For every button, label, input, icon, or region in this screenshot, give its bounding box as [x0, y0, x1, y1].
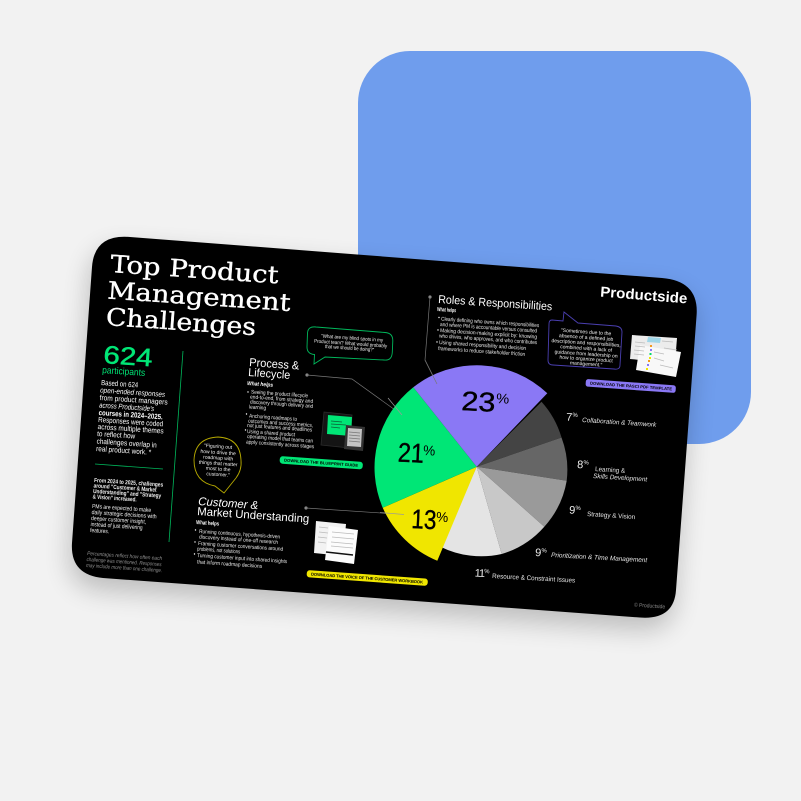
- participants stat: participants: [102, 365, 146, 379]
- quote bubble: purple: description and responsibilities,: [551, 338, 621, 349]
- section: process and lifecycle: learning: [249, 405, 266, 412]
- section: customer and market understanding: discovery instead of one-off research: [199, 535, 278, 546]
- slice: strategy 9%: [477, 467, 567, 527]
- pie value: 23%: [461, 386, 510, 418]
- label: strategy: 9: [569, 505, 576, 517]
- pie value: 13%: %: [436, 509, 449, 525]
- quote bubble: yellow: things that matter: [199, 460, 238, 468]
- label: strategy: %: [575, 506, 582, 512]
- trend text block: daily strategic decisions with: [91, 510, 157, 520]
- quote bubble: green: [307, 327, 393, 364]
- section: roles and responsibilities: Making decision-making explicit by: knowing: [440, 328, 537, 341]
- copyright: © Productside: [634, 602, 665, 611]
- label: strategy: Strategy & Vision: [587, 511, 636, 521]
- participants stat: [102, 341, 154, 379]
- quote bubble: yellow: how to drive the: [200, 449, 236, 457]
- slice: roles 23%: [413, 365, 547, 467]
- trend text block: instead of just delivering: [90, 522, 143, 532]
- trend text block: deeper customer insight,: [91, 516, 147, 526]
- section: customer and market understanding: Customer &: [198, 496, 259, 512]
- section: roles and responsibilities: Roles & Responsibilities: [438, 294, 553, 313]
- section: customer and market understanding: Turning customer input into shared insights: [197, 553, 288, 565]
- label: prioritization: Prioritization & Time Management: [551, 552, 648, 564]
- logo: Productside: Productside: [600, 285, 688, 307]
- quote bubble: purple: absence of a defined job: [559, 333, 614, 343]
- thumbnail: responsibilities template: [630, 335, 681, 377]
- intro text block: courses in 2024–2025.: [98, 408, 163, 421]
- connector: roles: [425, 295, 437, 384]
- label: resource: %: [484, 569, 490, 575]
- section: customer and market understanding: [194, 496, 310, 570]
- slice: prioritization 9%: [477, 467, 544, 554]
- trend text block: features.: [90, 528, 110, 535]
- intro text block: [96, 378, 168, 457]
- slice: customer 13%: [383, 467, 477, 561]
- slice: resource 11%: [440, 467, 502, 556]
- section: roles and responsibilities: Using shared responsibility and decision: [439, 340, 526, 352]
- quote bubble: yellow: [194, 437, 241, 493]
- connector: process: [305, 373, 402, 415]
- intro text block: across Productside's: [99, 401, 155, 413]
- section: process and lifecycle: outcomes and success metrics,: [248, 419, 314, 429]
- label: resource: Resource & Constraint Issues: [492, 573, 576, 585]
- intro text block: from product managers: [99, 393, 168, 407]
- participants stat: 624: [103, 341, 154, 372]
- pie value: 13%: 13: [411, 504, 437, 535]
- footnote: [86, 551, 162, 574]
- section: customer and market understanding: Framing customer conversations around: [198, 541, 283, 553]
- button: blueprint guide: DOWNLOAD THE BLUEPRINT GUIDE: [284, 458, 359, 468]
- label: strategy: [569, 505, 636, 521]
- title: Management: [107, 277, 292, 317]
- quote bubble: purple: combined with a lack of: [560, 344, 613, 354]
- black card: [72, 237, 697, 618]
- intro text block: Based on 624: [101, 378, 138, 390]
- section: process and lifecycle: not just features and deadlines: [247, 423, 313, 434]
- quote bubble: yellow: roadmap with: [203, 454, 233, 463]
- quote bubble: purple: management.": [570, 360, 603, 369]
- slice: process 21%: [375, 387, 477, 508]
- quote bubble: purple: guidance from leadership on: [554, 349, 618, 360]
- section: process and lifecycle: end-to-end, from strategy and: [250, 395, 313, 405]
- label: collaboration: Collaboration & Teamwork: [582, 417, 657, 429]
- label: prioritization: %: [541, 548, 548, 555]
- title: Top Product: [110, 250, 280, 289]
- connector: customer: [304, 506, 404, 514]
- slice: learning 8%: [477, 438, 567, 481]
- label: learning: %: [583, 460, 590, 467]
- trend text block: & Vision" increased.: [92, 495, 137, 504]
- section: customer and market understanding: What helps: [196, 520, 219, 528]
- label: learning: [577, 459, 648, 484]
- trend text block: Understanding" and "Strategy: [93, 489, 162, 500]
- intro text block: Responses were coded: [98, 415, 163, 428]
- section: process and lifecycle: Seeing the product lifecycle: [251, 390, 308, 399]
- section: process and lifecycle: Lifecycle: [248, 367, 291, 382]
- quote bubble: green: that we should be doing?": [325, 344, 374, 353]
- quote bubble: purple: "Sometimes due to the: [561, 328, 612, 337]
- button: template: DOWNLOAD THE RASCI PDF TEMPLATE: [590, 381, 673, 391]
- section: roles and responsibilities: [436, 294, 553, 358]
- label: resource: [474, 568, 576, 585]
- section: customer and market understanding: Market Understanding: [197, 506, 310, 526]
- footnote: may include more than one challenge.: [86, 563, 162, 574]
- intro text block: challenges overlap in: [96, 437, 157, 450]
- section: process and lifecycle: Process &: [249, 357, 300, 373]
- intro text block: across multiple themes: [97, 422, 164, 436]
- section: process and lifecycle: Anchoring roadmaps to: [249, 414, 297, 423]
- trend text block: From 2024 to 2025, challenges: [94, 478, 164, 489]
- trend text block: [90, 478, 164, 535]
- section: process and lifecycle: apply consistently across stages: [246, 440, 315, 450]
- label: learning: Learning &: [595, 466, 626, 475]
- card shadow: [70, 249, 695, 630]
- quote bubble: yellow: most to the: [206, 466, 231, 473]
- thumbnail: customer workbook: [314, 521, 358, 564]
- footnote: challenge was mentioned. Responses: [86, 557, 162, 568]
- section: customer and market understanding: Running continuous, hypothesis-driven: [199, 529, 280, 541]
- quote bubble: green: "What are my blind spots in my: [321, 334, 384, 344]
- quote bubble: yellow: "Figuring out: [204, 443, 233, 451]
- quote bubble: purple: how to organize product: [559, 355, 614, 364]
- intro text block: to reflect how: [97, 429, 136, 441]
- pie value: 23%: %: [496, 390, 510, 407]
- button: blueprint guide: [279, 456, 363, 469]
- button: customer workbook: DOWNLOAD THE VOICE OF THE CUSTOMER WORKBOOK: [311, 572, 423, 585]
- quote bubble: purple: [548, 312, 622, 369]
- trend text block: around "Customer & Market: [93, 484, 157, 494]
- blue rounded square: [358, 51, 751, 444]
- section: customer and market understanding: problems, not solutions: [197, 547, 241, 555]
- section: process and lifecycle: Using a shared product: [247, 429, 296, 438]
- label: collaboration: 7: [566, 412, 573, 424]
- label: prioritization: [535, 547, 648, 564]
- section: roles and responsibilities: What helps: [437, 307, 456, 314]
- title: Challenges: [105, 303, 257, 341]
- section: roles and responsibilities: frameworks to reduce stakeholder friction: [438, 346, 525, 358]
- intro text block: real product work. *: [96, 444, 152, 457]
- label: learning: 8: [577, 459, 584, 471]
- section: roles and responsibilities: Clearly defining who owns which responsibilities: [441, 317, 540, 329]
- intro text block: open-ended responses: [100, 386, 166, 399]
- section: process and lifecycle: operating model that teams can: [247, 434, 313, 445]
- pie value: 21%: %: [423, 442, 436, 459]
- pie value: 21%: 21: [397, 438, 425, 469]
- pie chart: [375, 360, 567, 561]
- section: process and lifecycle: [245, 357, 315, 450]
- section: process and lifecycle: What helps: [247, 381, 273, 389]
- label: prioritization: 9: [535, 547, 542, 559]
- label: learning: Skills Development: [593, 473, 648, 484]
- section: customer and market understanding: that inform roadmap decisions: [197, 560, 263, 570]
- label: resource: 11: [474, 568, 484, 580]
- footnote: Percentages reflect how often each: [87, 551, 162, 562]
- quote bubble: yellow: customer.": [206, 471, 230, 479]
- section: roles and responsibilities: who drives, who approves, and who contributes: [438, 333, 538, 346]
- trend text block: PMs are expected to make: [92, 504, 152, 514]
- slice: collaboration 7%: [477, 402, 562, 467]
- pie value: 23%: 23: [461, 386, 496, 418]
- quote bubble: green: Product team? What would probably: [314, 339, 388, 350]
- label: collaboration: %: [572, 413, 579, 419]
- thumbnail: blueprint guide: [321, 412, 365, 451]
- label: collaboration: [566, 412, 657, 429]
- section: roles and responsibilities: and where PM is accountable versus consulted: [440, 322, 537, 335]
- title: [105, 250, 292, 341]
- section: process and lifecycle: discovery through delivery and: [250, 400, 313, 410]
